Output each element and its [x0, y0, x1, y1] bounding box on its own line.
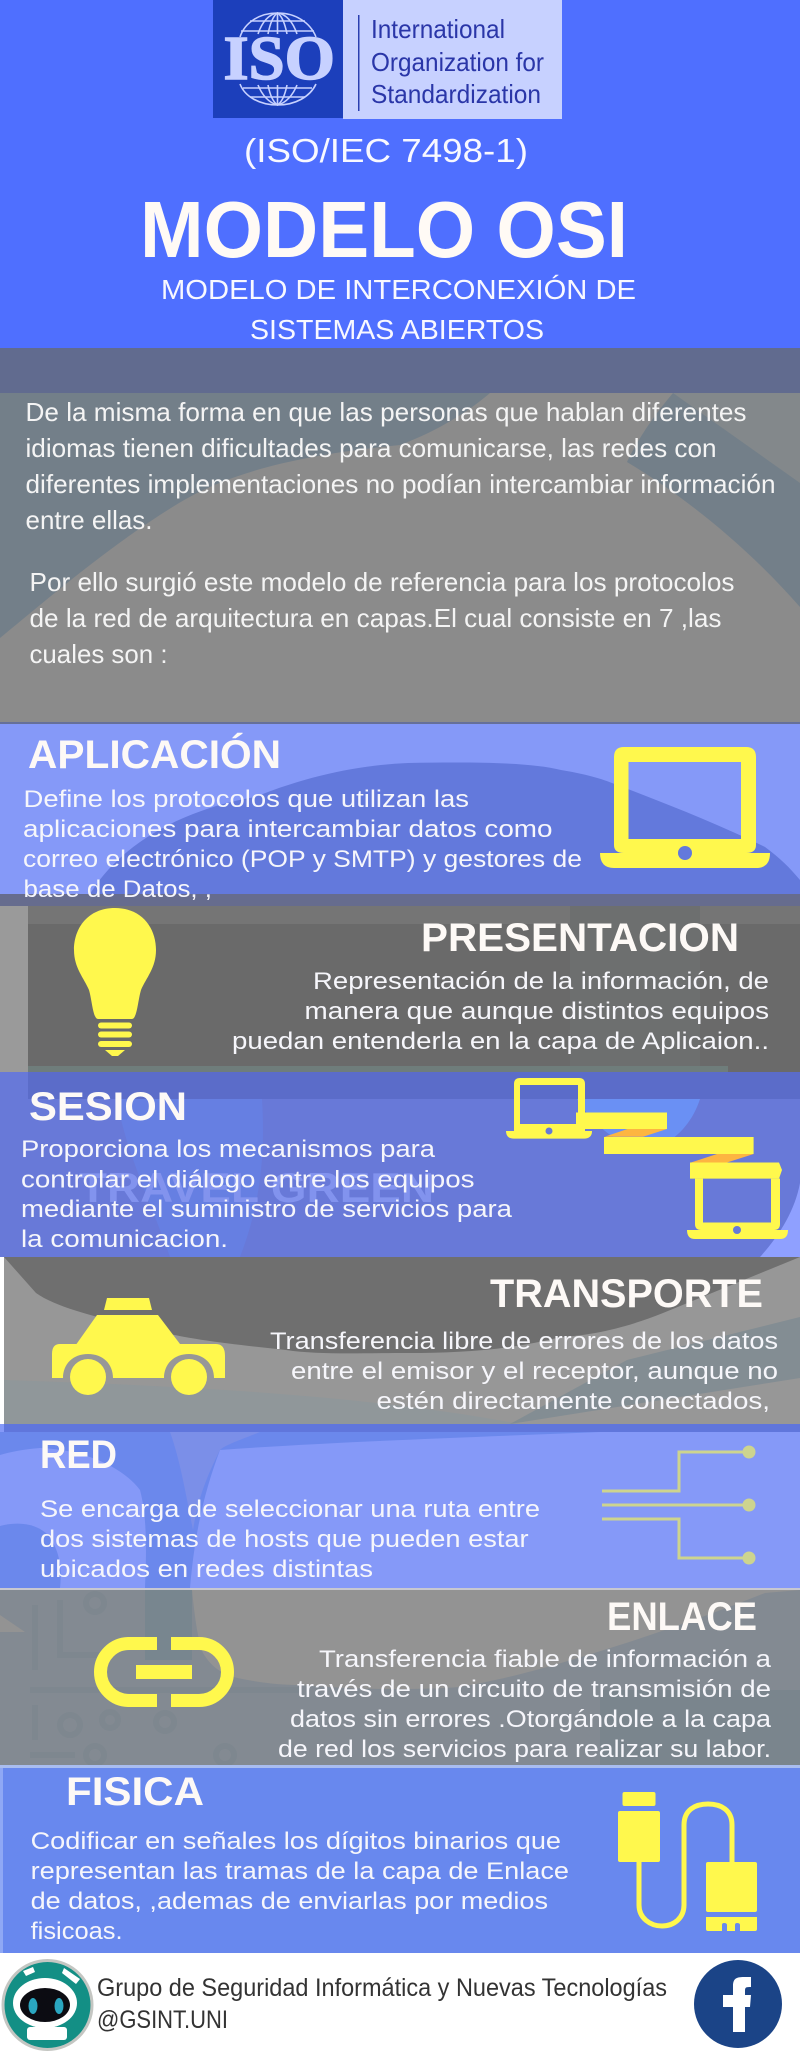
ISO logo: ISO [224, 25, 335, 93]
panel: enlace [0, 1588, 800, 1765]
heading: FISICA [66, 1770, 204, 1814]
intro paragraph one [26, 397, 775, 535]
description: fisicoas. [31, 1918, 123, 1945]
description [40, 1496, 540, 1583]
description [31, 1828, 569, 1945]
subtitle: MODELO DE INTERCONEXIÓN DE [161, 274, 636, 305]
icon: chain link [100, 1644, 228, 1700]
panel: introduction [0, 348, 800, 724]
description: la comunicacion. [21, 1226, 228, 1253]
description: Codificar en señales los dígitos binarios que [31, 1828, 561, 1855]
description: través de un circuito de transmisión de [297, 1676, 771, 1703]
description: aplicaciones para intercambiar datos como [23, 816, 552, 843]
heading: RED [40, 1433, 117, 1477]
description: manera que aunque distintos equipos [304, 998, 769, 1025]
icon: connected laptops [506, 1078, 788, 1239]
icon: network lines [602, 1446, 756, 1564]
intro paragraph two: de la red de arquitectura en capas.El cual consiste en 7 ,las [30, 603, 722, 633]
panel: transporte [4, 1257, 800, 1424]
intro paragraph one: De la misma forma en que las personas que hablan diferentes [26, 397, 746, 427]
description: Transferencia fiable de información a [319, 1646, 772, 1673]
icon: facebook [694, 1960, 782, 2048]
description: representan las tramas de la capa de Enlace [31, 1858, 569, 1885]
title: MODELO OSI [140, 185, 628, 274]
ISO logo [213, 0, 562, 119]
description: entre el emisor y el receptor, aunque no [291, 1358, 778, 1385]
description: datos sin errores .Otorgándole a la capa [290, 1706, 772, 1733]
watermark: TRAVEL GREEN [79, 1164, 434, 1211]
heading: APLICACIÓN [28, 731, 281, 777]
standard reference: (ISO/IEC 7498-1) [244, 132, 528, 169]
heading: SESION [29, 1085, 187, 1129]
description [21, 1136, 513, 1253]
intro paragraph two [30, 567, 734, 669]
description: de datos, ,ademas de enviarlas por medios [31, 1888, 548, 1915]
description: mediante el suministro de servicios para [21, 1196, 513, 1223]
intro paragraph two: cuales son : [30, 639, 168, 669]
ISO logo: Standardization [371, 79, 541, 109]
icon: usb cable [618, 1792, 757, 1931]
subtitle: SISTEMAS ABIERTOS [250, 314, 544, 345]
handle: @GSINT.UNI [97, 2006, 228, 2034]
description: estén directamente conectados, [376, 1388, 770, 1415]
description: Se encarga de seleccionar una ruta entre [40, 1496, 540, 1523]
ISO logo: Organization for [371, 47, 544, 77]
heading: PRESENTACION [421, 916, 739, 960]
icon: light bulb [74, 908, 156, 1056]
panel: footer [2, 1959, 782, 2051]
description: Transferencia libre de errores de los datos [270, 1328, 778, 1355]
heading: ENLACE [607, 1595, 757, 1639]
description [278, 1646, 772, 1763]
intro paragraph one: diferentes implementaciones no podían intercambiar información [26, 469, 775, 499]
panel: presentacion [0, 906, 800, 1072]
description [23, 786, 582, 903]
panel: fisica [0, 1765, 800, 1953]
description: Define los protocolos que utilizan las [24, 786, 469, 813]
description: controlar el diálogo entre los equipos [21, 1166, 475, 1194]
heading: TRANSPORTE [490, 1272, 763, 1316]
description: ubicados en redes distintas [40, 1556, 373, 1583]
panel: aplicacion [0, 724, 800, 906]
panel: header [0, 0, 800, 348]
description: correo electrónico (POP y SMTP) y gestores de [23, 846, 582, 873]
panel: red [0, 1424, 800, 1588]
group name: Grupo de Seguridad Informática y Nuevas Tecnologías [97, 1974, 667, 2002]
description: base de Datos, , [24, 876, 212, 903]
intro paragraph two: Por ello surgió este modelo de referencia para los protocolos [30, 567, 734, 597]
intro paragraph one: entre ellas. [26, 505, 152, 535]
description: Representación de la información, de [313, 968, 769, 995]
panel: sesion [0, 1072, 800, 1257]
description: Proporciona los mecanismos para [21, 1136, 436, 1163]
description [270, 1328, 778, 1415]
description: de red los servicios para realizar su labor. [278, 1736, 771, 1763]
ISO logo: International [371, 14, 505, 44]
subtitle [161, 274, 636, 345]
icon: taxi [52, 1298, 225, 1395]
description [232, 968, 769, 1055]
description: dos sistemas de hosts que pueden estar [40, 1526, 529, 1553]
icon: laptop [600, 747, 770, 868]
intro paragraph one: idiomas tienen dificultades para comunicarse, las redes con [26, 433, 716, 463]
icon: robot mascot [2, 1959, 94, 2051]
description: puedan entenderla en la capa de Aplicaion.. [232, 1028, 769, 1055]
